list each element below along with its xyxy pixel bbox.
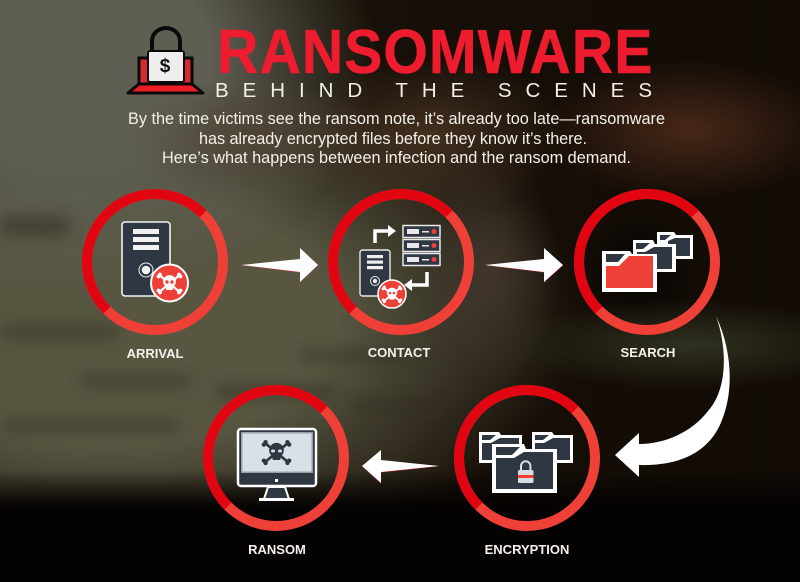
arrow: contact to search: [485, 248, 563, 282]
icon: locked folders: [479, 432, 573, 493]
step: contact: [333, 194, 469, 360]
arrow: encryption to ransom: [362, 450, 439, 484]
arrow: arrival to contact: [241, 248, 318, 282]
step: encryption: [459, 390, 595, 557]
label: ARRIVAL: [127, 346, 183, 361]
keyboard blur bands: [0, 215, 440, 432]
intro text: [128, 110, 665, 167]
subtitle: BEHIND THE SCENES: [215, 79, 652, 102]
step: search: [579, 194, 715, 360]
intro text: By the time victims see the ransom note, it’s already too late—ransomware: [128, 110, 665, 128]
icon: server contacts c&c: [360, 225, 440, 308]
label: ENCRYPTION: [485, 542, 569, 557]
icon: folders: [602, 232, 693, 292]
arrow: search to encryption: [615, 316, 730, 477]
icon: server with skull: [122, 222, 188, 302]
label: CONTACT: [368, 345, 430, 360]
step: arrival: [87, 194, 223, 361]
title: RANSOMWARE: [217, 17, 652, 87]
logo icon: laptop with padlock: [128, 28, 203, 93]
logo icon: laptop with padlock: $: [160, 56, 171, 77]
label: RANSOM: [248, 542, 306, 557]
label: SEARCH: [621, 345, 675, 360]
icon: monitor with skull: [238, 429, 316, 501]
intro text: Here’s what happens between infection and the ransom demand.: [162, 149, 631, 167]
step: ransom: [208, 390, 344, 557]
intro text: has already encrypted files before they know it’s there.: [199, 130, 587, 148]
